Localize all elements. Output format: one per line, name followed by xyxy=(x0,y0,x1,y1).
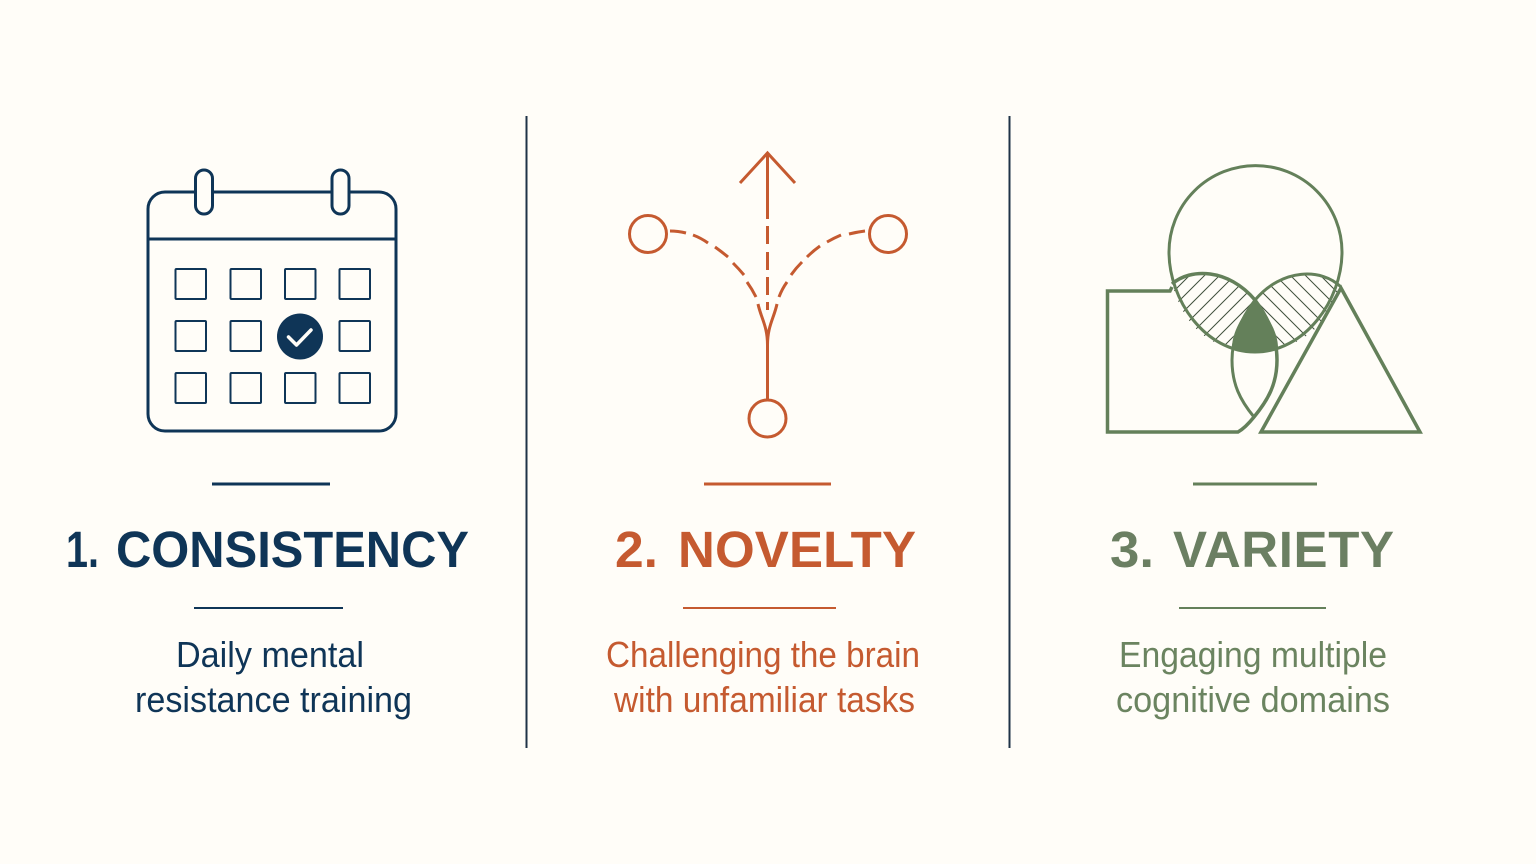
heading: variety: VARIETY xyxy=(1173,521,1394,578)
heading: variety: 3. xyxy=(1110,521,1154,578)
panel: variety xyxy=(1108,166,1420,720)
text: consistency description: Daily mental xyxy=(176,634,364,675)
heading: consistency: 1. xyxy=(66,521,99,578)
text: variety description: cognitive domains xyxy=(1116,679,1390,720)
panel: novelty xyxy=(606,153,920,720)
text: consistency description: resistance training xyxy=(135,679,412,720)
text: novelty description: Challenging the brain xyxy=(606,634,920,675)
icon: branching paths xyxy=(630,153,906,437)
heading: novelty: NOVELTY xyxy=(678,521,916,578)
heading: consistency: CONSISTENCY xyxy=(116,521,469,578)
text: novelty description: with unfamiliar tasks xyxy=(613,679,915,720)
heading: novelty: 2. xyxy=(615,521,658,578)
icon: overlapping shapes xyxy=(1108,166,1420,432)
text: variety description: Engaging multiple xyxy=(1119,634,1387,675)
panel: consistency xyxy=(66,170,469,720)
icon: calendar xyxy=(148,170,396,431)
